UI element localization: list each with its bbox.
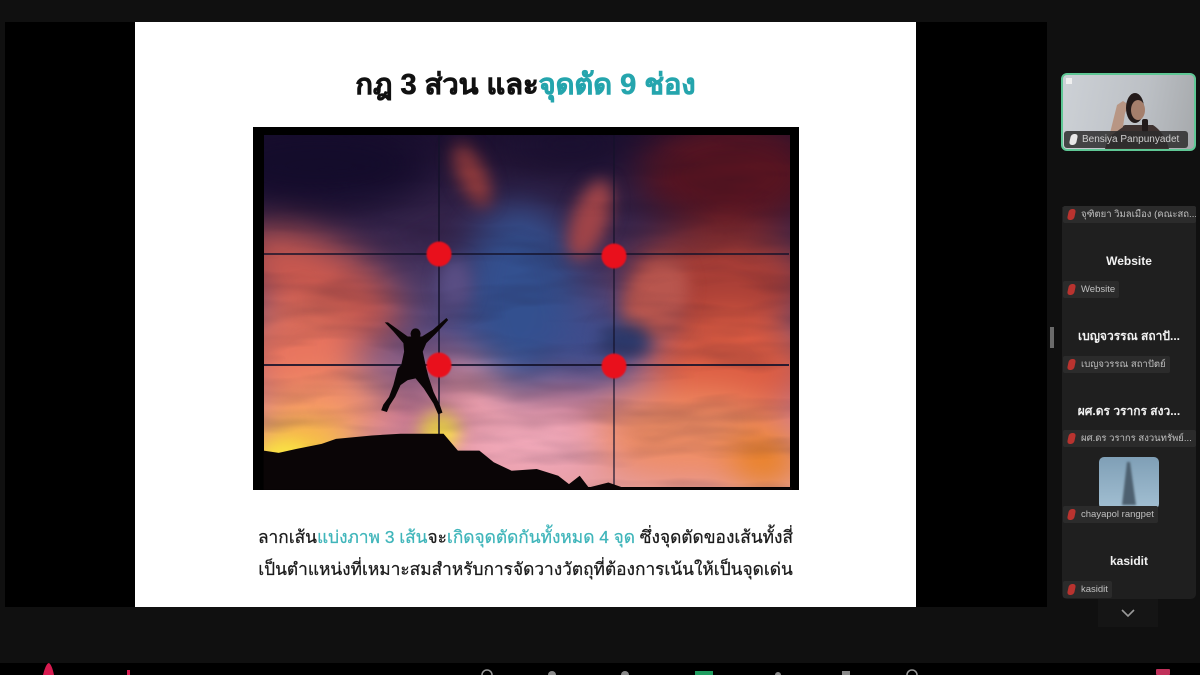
participant: Warakorn bbox=[1063, 404, 1196, 447]
presentation area bbox=[5, 22, 1047, 607]
speaker figure bbox=[1066, 78, 1169, 149]
slide caption: ลากเส้นแบ่งภาพ 3 เส้นจะเกิดจุดตัดกันทั้งหมด 4 จุด ซึ่งจุดตัดของเส้นทั้งสี่ bbox=[258, 527, 793, 547]
participant: Warakorn: ผศ.ดร วรากร สงวนทรัพย์... bbox=[1081, 433, 1192, 444]
participant: chayapol: chayapol rangpet bbox=[1081, 509, 1154, 520]
participant: Warakorn: ผศ.ดร วรากร สงว... bbox=[1078, 404, 1180, 418]
participant: Website: Website bbox=[1106, 254, 1152, 268]
grid lines bbox=[264, 135, 789, 486]
participant list panel bbox=[1062, 207, 1196, 599]
participant: chayapol bbox=[1063, 457, 1159, 523]
sidebar scroll handle bbox=[1050, 327, 1054, 348]
scroll down chevron bbox=[1122, 609, 1134, 618]
participant: kasidit: kasidit bbox=[1081, 584, 1108, 595]
participant: Benjawan: เบญจวรรณ สถาปั... bbox=[1078, 329, 1180, 343]
participant tile: speaker bbox=[1061, 73, 1196, 151]
slide title: กฎ 3 ส่วน และจุดตัด 9 ช่อง bbox=[355, 69, 696, 101]
toolbar icons bbox=[43, 663, 1170, 675]
participant: Website bbox=[1063, 254, 1152, 298]
participant: kasidit: kasidit bbox=[1110, 554, 1148, 568]
participant: top tag bbox=[1063, 206, 1196, 223]
participant: Benjawan: เบญจวรรณ สถาปัตย์ bbox=[1081, 359, 1166, 370]
bottom toolbar bbox=[0, 663, 1200, 675]
participant: Website: Website bbox=[1081, 284, 1115, 295]
speaker name bbox=[1064, 131, 1188, 148]
rule of thirds photo bbox=[253, 127, 799, 490]
speaker name: Bensiya Panpunyadet bbox=[1082, 134, 1179, 145]
slide caption bbox=[258, 524, 793, 580]
participant: top tag: จุฑิตยา วิมลเมือง (คณะสถ... bbox=[1081, 209, 1196, 220]
slide caption: เป็นตำแหน่งที่เหมาะสมสำหรับการจัดวางวัตถุที่ต้องการเน้นให้เป็นจุดเด่น bbox=[258, 559, 793, 579]
participant: kasidit bbox=[1063, 554, 1148, 598]
silhouette: hill and jumping figure bbox=[264, 318, 792, 490]
intersection points bbox=[426, 242, 626, 378]
slide bbox=[135, 22, 916, 607]
participant: Benjawan bbox=[1063, 329, 1180, 373]
avatar: tower bbox=[1099, 457, 1159, 508]
